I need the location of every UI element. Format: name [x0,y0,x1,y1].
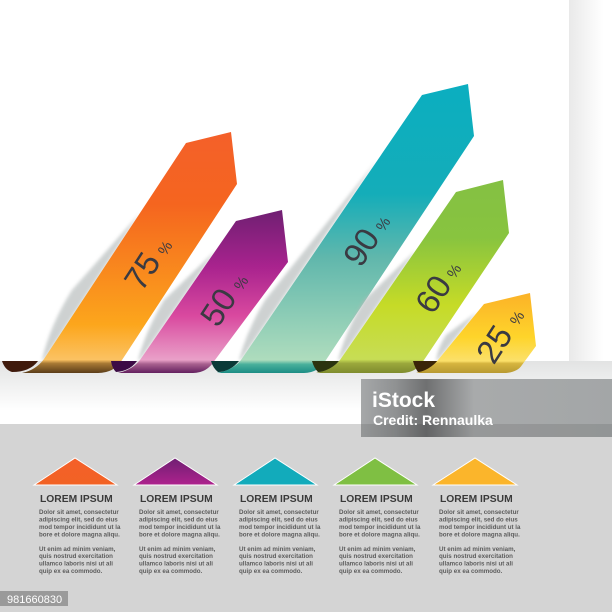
body text [39,509,121,575]
body text: adipiscing elit, sed do eius [139,516,218,524]
body text: quis nostrud exercitation [39,553,113,560]
heading: LOREM IPSUM [140,494,213,505]
body text: ullamco laboris nisi ut ali [339,560,413,568]
label: 90%: % [373,214,394,235]
image id tag [0,591,68,606]
body text: Ut enim ad minim veniam, [139,546,216,553]
column 2 [134,458,221,575]
body text: mod tempor incididunt ut la [39,524,121,531]
body text: ullamco laboris nisi ut ali [39,560,113,568]
image id tag: 981660830 [7,594,62,606]
heading: LOREM IPSUM [440,494,513,505]
body text: Ut enim ad minim veniam, [439,546,516,553]
triangle: orange [34,458,117,485]
body text: ullamco laboris nisi ut ali [439,560,513,568]
bottom page shadow [0,361,612,411]
label: 75%: 75 [117,246,168,297]
watermark banner [361,379,612,437]
body text: ullamco laboris nisi ut ali [139,560,213,568]
column 5 [433,458,521,575]
label: 25%: 25 [469,319,520,370]
body text: quis nostrud exercitation [139,553,213,560]
body text: ullamco laboris nisi ut ali [239,560,313,568]
body text: adipiscing elit, sed do eius [39,516,118,524]
body text: Ut enim ad minim veniam, [239,546,316,553]
body text: Ut enim ad minim veniam, [339,546,416,553]
body text: mod tempor incididunt ut la [439,524,521,531]
body text: quip ex ea commodo. [239,568,303,575]
label: 75%: % [155,238,176,259]
ribbon: 50 percent purple [111,210,288,373]
body text: bore et dolore magna aliqu. [239,532,320,538]
body text [239,509,321,575]
body text [339,509,421,575]
heading: LOREM IPSUM [340,494,413,505]
triangle: yellow [433,458,517,485]
body text: mod tempor incididunt ut la [339,524,421,531]
body text: quis nostrud exercitation [239,553,313,560]
column 1 [34,458,121,575]
triangle: teal [234,458,317,485]
body text: quis nostrud exercitation [339,553,413,560]
ribbon: 90 percent teal [211,84,474,373]
bottom grey panel [0,424,612,612]
label: 90%: 90 [336,222,387,273]
body text: Ut enim ad minim veniam, [39,546,116,553]
label: 50%: % [231,273,252,294]
body text: quip ex ea commodo. [139,568,203,575]
body text: adipiscing elit, sed do eius [239,516,318,524]
body text: bore et dolore magna aliqu. [339,532,420,538]
body text [139,509,221,575]
body text: Dolor sit amet, consectetur [239,509,319,516]
body text: Dolor sit amet, consectetur [39,509,119,516]
ribbon: 25 percent yellow [413,293,536,373]
heading: LOREM IPSUM [40,494,113,505]
body text: Dolor sit amet, consectetur [439,509,519,516]
column 4 [334,458,421,575]
triangle: green [334,458,417,485]
label: 60%: % [444,261,465,282]
label: 25%: % [507,308,528,329]
body text: mod tempor incididunt ut la [239,524,321,531]
triangle: purple [134,458,217,485]
label: 50%: 50 [193,282,244,333]
body text: adipiscing elit, sed do eius [339,516,418,524]
watermark credit: Credit: Rennaulka [373,412,493,428]
body text: quip ex ea commodo. [339,568,403,575]
body text [439,509,521,575]
ribbon: 75 percent orange [2,132,237,373]
body text: bore et dolore magna aliqu. [139,532,220,538]
body text: adipiscing elit, sed do eius [439,516,518,524]
body text: bore et dolore magna aliqu. [39,532,120,538]
body text: bore et dolore magna aliqu. [439,532,520,538]
body text: quis nostrud exercitation [439,553,513,560]
body text: mod tempor incididunt ut la [139,524,221,531]
body text: quip ex ea commodo. [39,568,103,575]
heading: LOREM IPSUM [240,494,313,505]
body text: quip ex ea commodo. [439,568,503,575]
column 3 [234,458,321,575]
body text: Dolor sit amet, consectetur [339,509,419,516]
white paper sheet [0,0,569,361]
watermark logo: iStock [372,389,435,412]
right page shadow [569,0,612,424]
label: 60%: 60 [408,269,459,320]
body text: Dolor sit amet, consectetur [139,509,219,516]
ribbon: 60 percent green [312,180,509,373]
